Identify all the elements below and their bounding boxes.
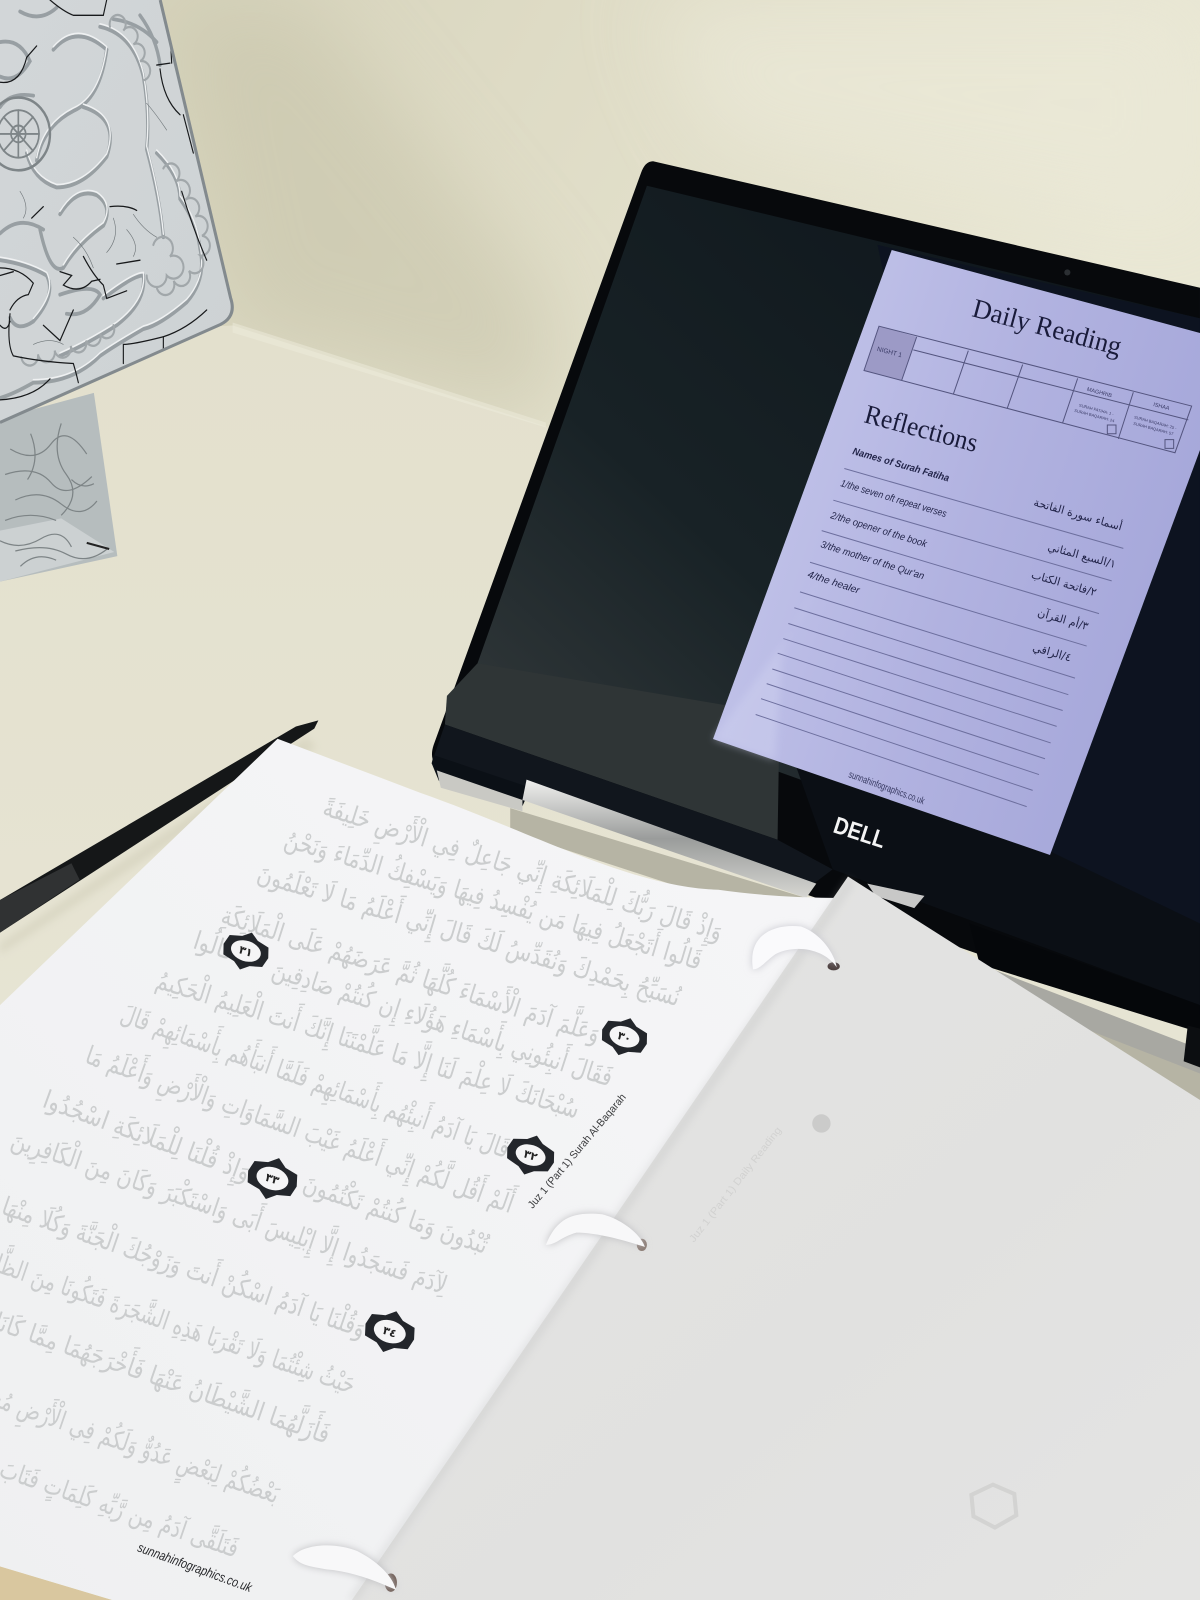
handwritten notes: English: 4/the healer — [806, 569, 861, 597]
black hinge right cap — [1184, 1026, 1200, 1067]
Arabic verse lines — [0, 787, 728, 1566]
handwritten notes: Arabic: ١/السبع المثاني — [1046, 540, 1117, 571]
chin reflection — [445, 663, 780, 840]
binding ring bottom — [293, 1545, 397, 1592]
handwritten notes: Arabic: ٣/أم القرآن — [1036, 605, 1090, 633]
Arabic verse lines: لِآدَمَ فَسَجَدُوا إِلَّا إِبْلِيسَ أَبَى وَاسْتَكْبَرَ وَكَانَ مِنَ الْكَافِرِينَ — [6, 1117, 454, 1305]
Arabic verse lines: وَعَلَّمَ آدَمَ الْأَسْمَاءَ كُلَّهَا ثُمَّ عَرَضَهُمْ عَلَى الْمَلَائِكَةِ — [217, 892, 606, 1049]
Arabic verse lines: أَلَمْ أَقُل لَّكُمْ إِنِّي أَعْلَمُ غَيْبَ السَّمَاوَاتِ وَالْأَرْضِ وَأَعْلَمُ مَا — [80, 1033, 521, 1225]
silver hinge tube — [522, 780, 816, 898]
Arabic verse lines: وَإِذْ قَالَ رَبُّكَ لِلْمَلَائِكَةِ إِنِّي جَاعِلٌ فِي الْأَرْضِ خَلِيفَةً — [318, 787, 728, 953]
wall — [0, 0, 1200, 449]
Arabic verse lines: نُسَبِّحُ بِحَمْدِكَ وَنُقَدِّسُ لَكَ قَالَ إِنِّي أَعْلَمُ مَا لَا تَعْلَمُونَ — [252, 852, 687, 1017]
chin navy strip — [434, 724, 833, 888]
running head: Juz 1 (Part 1) Surah Al-Baqarah — [526, 1092, 629, 1211]
verse marker 34: ٣٤ — [381, 1324, 398, 1340]
handwritten notes: English: 1/the seven oft repeat verses — [839, 478, 948, 520]
verse marker 30: ٣٠ — [616, 1029, 633, 1046]
Arabic verse lines: وَإِذْ قُلْنَا لِلْمَلَائِكَةِ اسْجُدُوا — [38, 1080, 256, 1191]
reading table: SURAH FATIHA: 1 - — [1078, 403, 1115, 417]
ruled lines — [756, 469, 1123, 807]
shadow beneath hinge — [510, 808, 1200, 1102]
workbook left page — [0, 739, 842, 1600]
handwritten notes: Arabic: أسماء سورة الفاتحة — [1032, 495, 1124, 533]
Arabic verse lines: سُبْحَانَكَ لَا عِلْمَ لَنَا إِلَّا مَا عَلَّمْتَنَا إِنَّكَ أَنتَ الْعَلِيمُ الْحَكِيمُ — [151, 957, 586, 1129]
screen footer url: sunnahinfographics.co.uk — [847, 769, 927, 807]
heading: Daily Reading: Daily Reading — [969, 293, 1125, 361]
Arabic verse lines: قَالَ يَا آدَمُ أَنبِئْهُم بِأَسْمَائِهِمْ فَلَمَّا أَنبَأَهُم بِأَسْمَائِهِمْ قَالَ — [115, 992, 516, 1169]
screen dark side panel — [878, 245, 1200, 1005]
handwritten notes: English: Names of Surah Fatiha — [851, 446, 951, 485]
show-through marks — [688, 1114, 1016, 1528]
binding ring top — [752, 926, 840, 970]
reading table: SURAH BAQARAH: 25 - — [1134, 414, 1178, 431]
laptop logo: DELL — [830, 812, 889, 854]
handwritten notes: Arabic — [1030, 495, 1124, 664]
screen: worksheet page — [713, 250, 1200, 855]
verse marker 33 — [242, 1150, 303, 1207]
laptop — [432, 161, 1200, 1102]
Arabic verse lines: قَالُوا — [190, 921, 239, 967]
verse marker 33: ٣٣ — [264, 1171, 281, 1187]
silver base — [437, 770, 522, 811]
workbook right page — [347, 877, 1200, 1600]
verse marker 30 — [596, 1011, 653, 1062]
webcam — [1064, 269, 1070, 276]
hinge left cap — [432, 755, 531, 806]
heading: Reflections: Reflections — [861, 399, 981, 458]
laptop bezel — [432, 161, 1200, 1031]
handwritten notes: English — [806, 446, 951, 597]
ornate lamp shade — [0, 0, 232, 582]
verse marker 31 — [218, 925, 274, 977]
silver base right — [959, 964, 1200, 1073]
rosette — [0, 98, 50, 170]
reading table: SURAH BAQARAH: 24 — [1074, 408, 1116, 424]
lower chin — [778, 714, 1200, 1005]
Arabic verse lines: تُبْدُونَ وَمَا كُنتُمْ تَكْتُمُونَ — [299, 1165, 494, 1261]
binding ring middle — [546, 1214, 647, 1251]
reading table: ISHAA — [1153, 402, 1170, 412]
reading table: SURAH BAQARAH: 57 — [1133, 421, 1175, 437]
verse marker 32: ٣٢ — [522, 1147, 539, 1164]
handwritten notes: Arabic: ٤/الراقي — [1031, 641, 1073, 664]
lamp base — [0, 393, 117, 582]
Arabic verse lines: قَالُوا أَتَجْعَلُ فِيهَا مَن يُفْسِدُ فِيهَا وَيَسْفِكُ الدِّمَاءَ وَنَحْنُ — [281, 818, 707, 976]
verse marker 31: ٣١ — [237, 943, 254, 960]
verse marker 32 — [501, 1128, 560, 1182]
Arabic verse lines: فَقَالَ أَنبِئُونِي بِأَسْمَاءِ هَؤُلَاءِ إِن كُنتُمْ صَادِقِينَ — [267, 947, 619, 1097]
torn tab behind right page — [867, 884, 924, 908]
show-through marks: Juz 1 (Part 1) Daily Reading — [688, 1125, 784, 1245]
desk surface — [0, 322, 1200, 1600]
reading table: MAGHRIB — [1086, 387, 1113, 399]
pen — [0, 720, 318, 954]
handwritten notes: English: 2/the opener of the book — [828, 510, 929, 550]
lamp tile — [0, 0, 232, 422]
reading table: NIGHT 1 — [876, 346, 903, 359]
reading table — [864, 326, 1192, 453]
handwritten notes: English: 3/the mother of the Qur'an — [819, 539, 926, 582]
laptop display — [478, 186, 1200, 923]
verse marker 34 — [359, 1303, 421, 1360]
handwritten notes: Arabic: ٢/فاتحة الكتاب — [1030, 568, 1098, 599]
